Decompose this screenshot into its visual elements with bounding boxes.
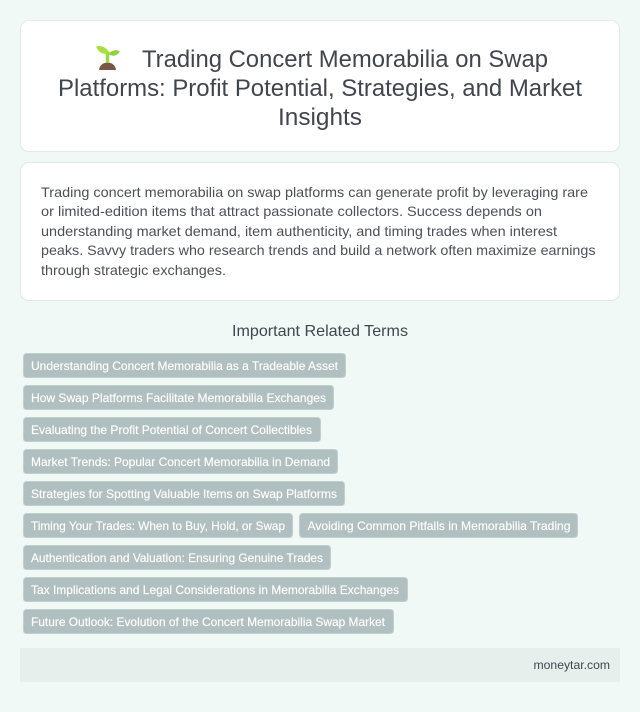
footer source text: moneytar.com [534, 658, 610, 672]
term pill 9 [24, 578, 408, 602]
icon: seedling [96, 46, 120, 70]
term pill 3: Evaluating the Profit Potential of Concert Collectibles [31, 423, 312, 437]
paragraph text [41, 184, 595, 278]
term pill 2: How Swap Platforms Facilitate Memorabilia Exchanges [31, 391, 326, 405]
term pill 6: Timing Your Trades: When to Buy, Hold, or Swap [31, 519, 285, 533]
footer bar [20, 648, 620, 682]
term pill 5 [24, 482, 344, 506]
term pill 4 [24, 450, 338, 474]
paragraph text: through strategic exchanges. [41, 262, 226, 278]
term pill 6 [24, 514, 292, 538]
title text: Insights [278, 104, 362, 131]
term pill 7 [300, 514, 578, 538]
term pill 2 [24, 386, 334, 410]
term pill 1: Understanding Concert Memorabilia as a Tradeable Asset [31, 359, 339, 373]
title text: Trading Concert Memorabilia on Swap [142, 46, 548, 73]
term pill 4: Market Trends: Popular Concert Memorabilia in Demand [31, 455, 330, 469]
panel: title card [20, 20, 620, 152]
title text: Platforms: Profit Potential, Strategies, and Market [58, 75, 582, 102]
term pill 10: Future Outlook: Evolution of the Concert Memorabilia Swap Market [31, 615, 386, 629]
term pill 3 [24, 418, 320, 442]
paragraph text: peaks. Savvy traders who research trends and build a network often maximize earnings [41, 242, 595, 258]
term pill 5: Strategies for Spotting Valuable Items on Swap Platforms [31, 487, 337, 501]
panel: summary paragraph card [20, 162, 620, 300]
term pill 8 [24, 546, 330, 570]
term pill 9: Tax Implications and Legal Considerations in Memorabilia Exchanges [31, 583, 399, 597]
term pill 10 [24, 610, 394, 634]
term pill 7: Avoiding Common Pitfalls in Memorabilia Trading [308, 519, 570, 533]
paragraph text: or limited-edition items that attract passionate collectors. Success depends on [41, 203, 542, 219]
paragraph text: understanding market demand, item authenticity, and timing trades when interest [41, 223, 557, 239]
paragraph text: Trading concert memorabilia on swap platforms can generate profit by leveraging rare [41, 184, 588, 200]
heading: Important Related Terms: Important Related Terms [232, 323, 408, 340]
term pill 1 [24, 354, 346, 378]
title text [58, 46, 582, 131]
panel: related terms pills [24, 354, 578, 634]
term pill 8: Authentication and Valuation: Ensuring Genuine Trades [31, 551, 323, 565]
